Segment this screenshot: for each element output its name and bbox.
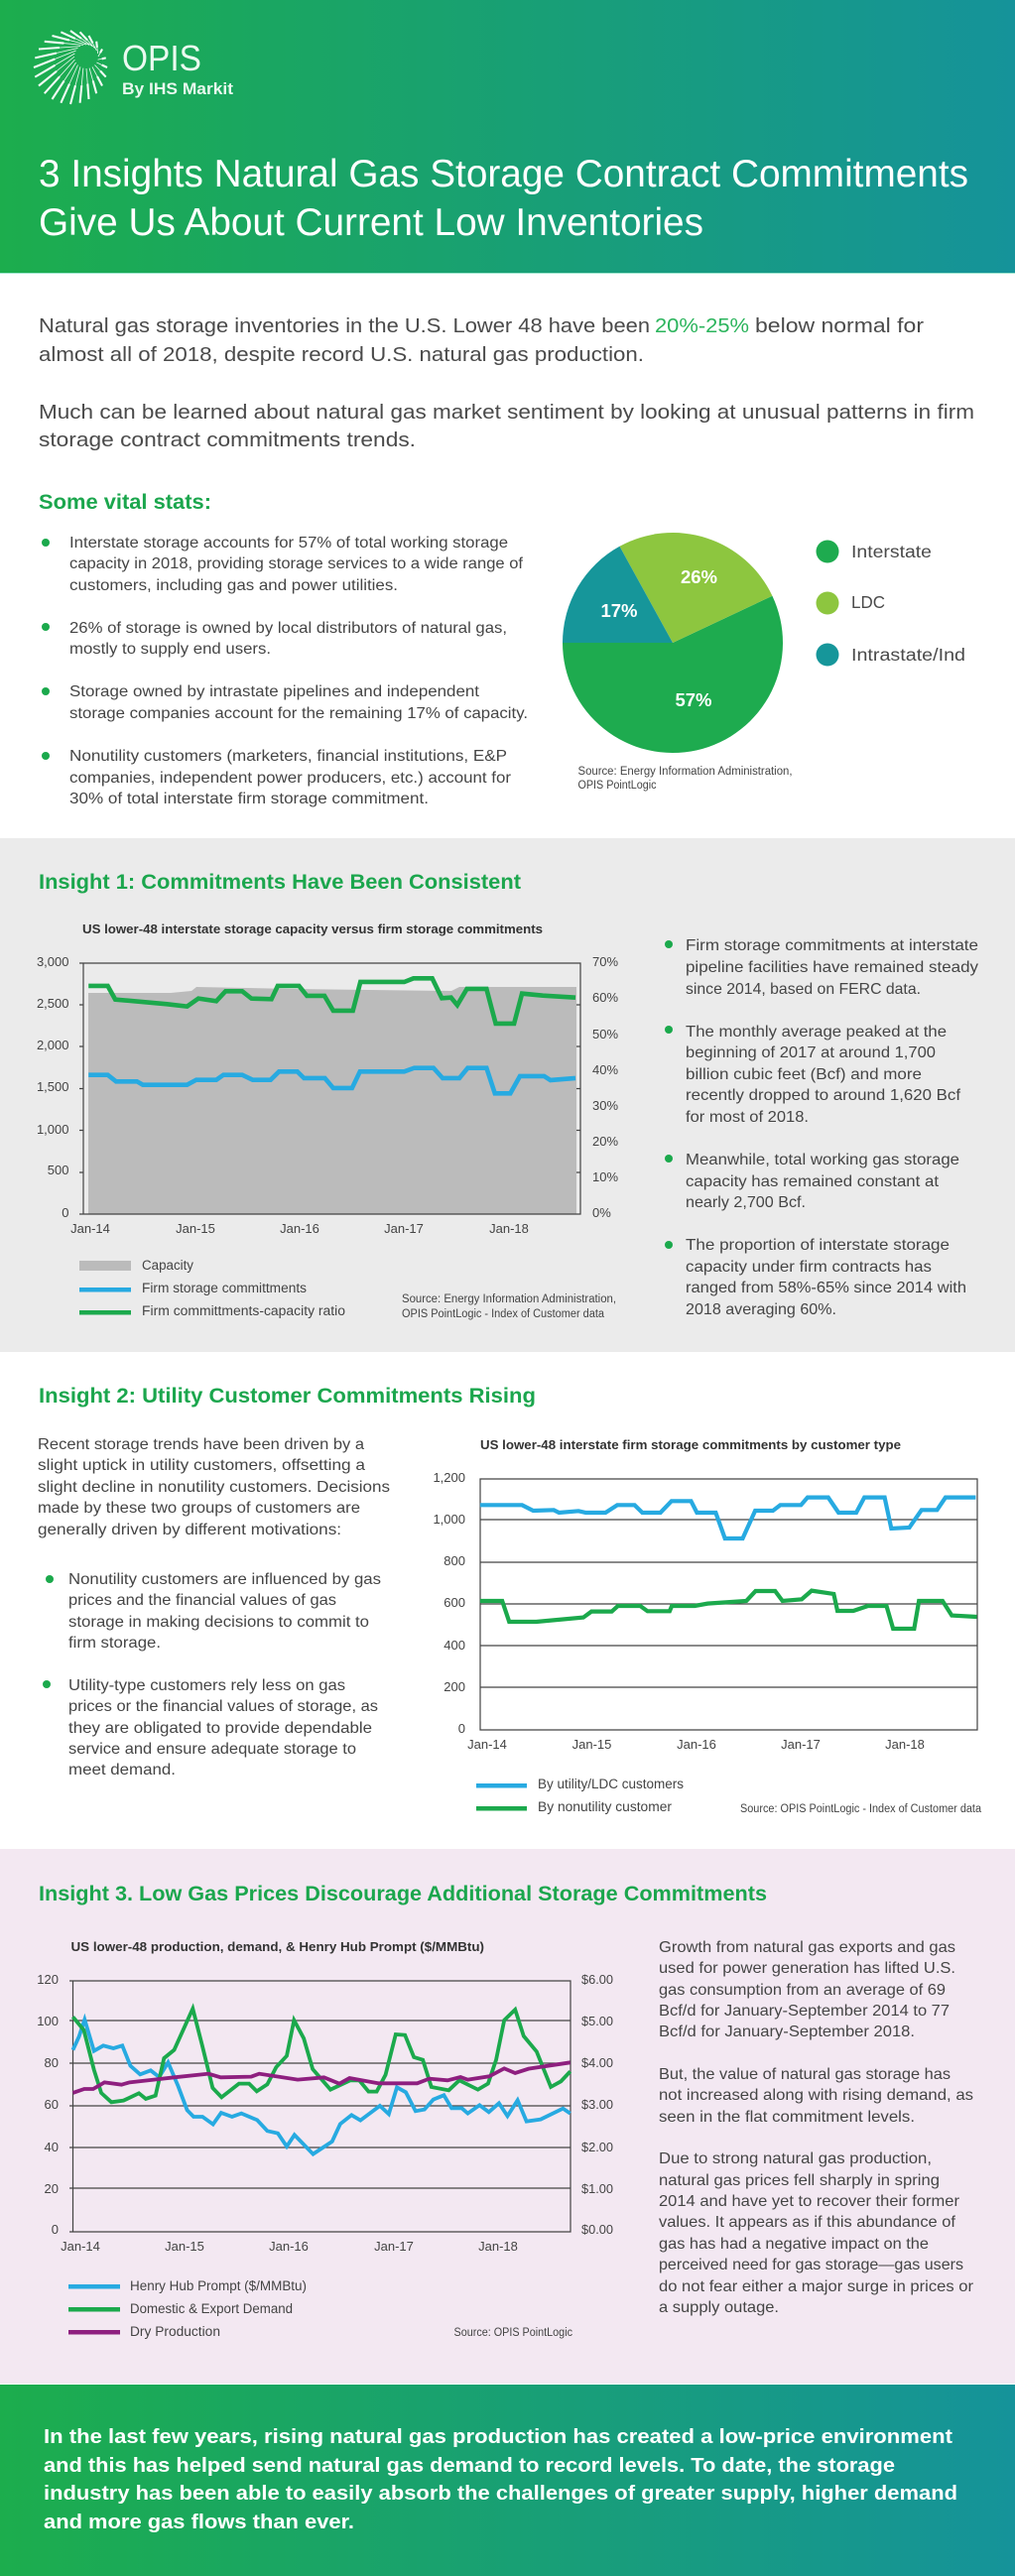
text block: insight 3: natural gas prices fell sharply in spring	[659, 2172, 940, 2189]
chart legend: Firm committments-capacity ratio	[142, 1303, 345, 1318]
bullet list: insight 1: ranged from 58%-65% since 2014 with	[686, 1280, 966, 1296]
area and line chart: capacity versus commitments: Jan-18	[489, 1221, 529, 1236]
area and line chart: capacity versus commitments: Jan-16	[280, 1221, 319, 1236]
area and line chart: capacity versus commitments: 0	[62, 1205, 69, 1220]
bullet list: insight 2: prices and the financial values of gas	[68, 1592, 336, 1609]
text block: insight 3: a supply outage.	[659, 2299, 779, 2316]
bullet list: insight 1: The monthly average peaked at the	[686, 1024, 947, 1041]
bullet list: vital stats: 30% of total interstate firm storage commitment.	[69, 791, 429, 807]
area and line chart: capacity versus commitments: 1,500	[37, 1079, 69, 1094]
bullet list: vital stats: 26% of storage is owned by local distributors of natural gas,	[69, 620, 507, 637]
chart legend	[79, 1258, 345, 1318]
line chart: production, demand and Henry Hub prompt: $2.00	[581, 2140, 613, 2154]
area and line chart: capacity versus commitments: 2,500	[37, 996, 69, 1011]
area and line chart: capacity versus commitments: 50%	[592, 1027, 618, 1042]
text block: insight 3: used for power generation has lifted U.S.	[659, 1960, 955, 1977]
pie chart: storage ownership: 26%	[681, 566, 717, 587]
line chart: production, demand and Henry Hub prompt: $1.00	[581, 2181, 613, 2196]
line chart: production, demand and Henry Hub prompt: 40	[45, 2140, 59, 2154]
bullet list: insight 2: meet demand.	[68, 1762, 176, 1779]
bullet list: insight 2: Utility-type customers rely less on gas	[68, 1677, 345, 1694]
intro paragraph: slight uptick in utility customers, offsetting a	[38, 1457, 365, 1474]
text block: insight 3: Bcf/d for January-September 2018.	[659, 2024, 915, 2040]
intro paragraph: slight decline in nonutility customers. Decisions	[38, 1479, 390, 1496]
area and line chart: capacity versus commitments: Jan-14	[70, 1221, 110, 1236]
source note: OPIS PointLogic - Index of Customer data	[402, 1308, 605, 1320]
text block: insight 3: Bcf/d for January-September 2014 to 77	[659, 2003, 950, 2020]
pie chart: storage ownership	[563, 533, 783, 753]
line chart: commitments by customer type: 400	[444, 1638, 465, 1653]
bullet list: insight 1	[665, 937, 978, 1318]
chart legend: Domestic & Export Demand	[130, 2301, 293, 2316]
text block: insight 3	[659, 1939, 974, 2316]
pie legend: LDC	[851, 592, 885, 612]
line chart: production, demand and Henry Hub prompt: 20	[45, 2181, 59, 2196]
line chart: production, demand and Henry Hub prompt: Jan-16	[269, 2239, 309, 2254]
line chart: production, demand and Henry Hub prompt: Jan-18	[478, 2239, 518, 2254]
area and line chart: capacity versus commitments: 500	[48, 1163, 69, 1177]
panel: insight 1	[0, 838, 1015, 1352]
bullet list: insight 2: storage in making decisions to commit to	[68, 1614, 369, 1631]
bullet list: insight 1: beginning of 2017 at around 1,700	[686, 1044, 936, 1061]
area and line chart: capacity versus commitments: 2,000	[37, 1038, 69, 1052]
bullet list: insight 1: billion cubic feet (Bcf) and more	[686, 1066, 922, 1083]
bullet list: vital stats	[42, 535, 528, 807]
line chart: commitments by customer type: Jan-18	[885, 1737, 925, 1752]
bullet list: insight 1: recently dropped to around 1,620 Bcf	[686, 1087, 961, 1104]
line chart: production, demand and Henry Hub prompt: Jan-17	[374, 2239, 414, 2254]
line chart: production, demand and Henry Hub prompt: 120	[37, 1972, 59, 1987]
bullet list: insight 1: nearly 2,700 Bcf.	[686, 1194, 806, 1211]
area and line chart: capacity versus commitments: 70%	[592, 954, 618, 969]
area and line chart: capacity versus commitments: Jan-15	[176, 1221, 215, 1236]
chart legend: By utility/LDC customers	[538, 1777, 684, 1791]
bullet list: insight 2: service and ensure adequate storage to	[68, 1741, 356, 1758]
bullet list: vital stats: capacity in 2018, providing storage services to a wide range of	[69, 555, 524, 572]
line chart: production, demand and Henry Hub prompt: Jan-14	[61, 2239, 100, 2254]
intro text: storage contract commitments trends.	[39, 429, 416, 451]
bullet list: insight 2: Nonutility customers are influenced by gas	[68, 1571, 381, 1588]
chart legend: Dry Production	[130, 2324, 220, 2339]
line chart: production, demand and Henry Hub prompt: $4.00	[581, 2055, 613, 2070]
bullet list: vital stats: customers, including gas and power utilities.	[69, 577, 398, 594]
line chart: production, demand and Henry Hub prompt	[37, 1972, 613, 2254]
bullet list: insight 2	[43, 1571, 381, 1779]
intro text: Natural gas storage inventories in the U.S. Lower 48 have been	[39, 314, 650, 337]
area and line chart: capacity versus commitments: 10%	[592, 1169, 618, 1184]
bullet list: insight 1: 2018 averaging 60%.	[686, 1301, 836, 1318]
intro paragraph: Recent storage trends have been driven by a	[38, 1436, 364, 1453]
pie legend: Intrastate/Ind	[851, 645, 965, 665]
source note: Source: Energy Information Administration,	[402, 1293, 616, 1305]
intro text	[39, 314, 974, 451]
pie source note	[577, 766, 792, 792]
line chart: production, demand and Henry Hub prompt: Jan-15	[165, 2239, 204, 2254]
bullet list: vital stats: Nonutility customers (marketers, financial institutions, E&P	[69, 748, 507, 765]
text block: insight 3: 2014 and have yet to recover their former	[659, 2193, 960, 2210]
line chart: commitments by customer type: Jan-15	[572, 1737, 611, 1752]
chart legend: By nonutility customer	[538, 1799, 673, 1814]
chart legend: Firm storage committments	[142, 1281, 307, 1295]
text block: insight 3: do not fear either a major surge in prices or	[659, 2278, 974, 2295]
intro text: almost all of 2018, despite record U.S. natural gas production.	[39, 343, 644, 366]
line chart: commitments by customer type: Jan-16	[677, 1737, 716, 1752]
text block: insight 3: seen in the flat commitment levels.	[659, 2109, 915, 2126]
bullet list: vital stats: Storage owned by intrastate pipelines and independent	[69, 683, 480, 700]
area and line chart: capacity versus commitments: 1,000	[37, 1122, 69, 1137]
closing statement: industry has been able to easily absorb the challenges of greater supply, higher demand	[44, 2482, 957, 2505]
line chart: production, demand and Henry Hub prompt: $3.00	[581, 2097, 613, 2112]
pie source note: OPIS PointLogic	[577, 780, 657, 792]
line chart: commitments by customer type: 600	[444, 1595, 465, 1610]
bullet list: insight 1: capacity under firm contracts has	[686, 1259, 932, 1276]
closing statement: and this has helped send natural gas demand to record levels. To date, the storage	[44, 2454, 895, 2477]
line chart: production, demand and Henry Hub prompt: 100	[37, 2014, 59, 2028]
bullet list: insight 2: they are obligated to provide dependable	[68, 1720, 372, 1737]
intro text: below normal for	[755, 314, 924, 337]
title: 3 Insights Natural Gas Storage Contract Commitments	[39, 153, 968, 195]
bullet list: insight 1: The proportion of interstate storage	[686, 1237, 950, 1254]
area and line chart: capacity versus commitments: 20%	[592, 1134, 618, 1149]
logo: OPIS By IHS Markit	[34, 31, 233, 104]
bullet list: insight 1: capacity has remained constant at	[686, 1173, 940, 1190]
line chart: commitments by customer type: 200	[444, 1679, 465, 1694]
bullet list: vital stats: mostly to supply end users.	[69, 641, 271, 658]
intro paragraph	[38, 1436, 390, 1538]
line chart: commitments by customer type: 1,000	[433, 1512, 465, 1527]
bullet list: insight 2: prices or the financial values of storage, as	[68, 1698, 378, 1715]
chart title: US lower-48 interstate firm storage commitments by customer type	[480, 1437, 901, 1452]
bullet list: insight 1: pipeline facilities have remained steady	[686, 959, 978, 976]
intro text: 20%-25%	[655, 314, 749, 337]
area and line chart: capacity versus commitments: Jan-17	[384, 1221, 424, 1236]
chart legend: Capacity	[142, 1258, 193, 1273]
bullet list: vital stats: storage companies account for the remaining 17% of capacity.	[69, 705, 528, 722]
line chart: production, demand and Henry Hub prompt: $5.00	[581, 2014, 613, 2028]
closing statement: In the last few years, rising natural gas production has created a low-price environment	[44, 2425, 952, 2448]
text block: insight 3: But, the value of natural gas storage has	[659, 2066, 951, 2083]
bullet list: insight 1: since 2014, based on FERC data.	[686, 981, 921, 998]
text block: insight 3: gas has had a negative impact on the	[659, 2236, 929, 2253]
pie legend	[816, 540, 965, 667]
bullet list: insight 1: for most of 2018.	[686, 1109, 809, 1126]
logo wordmark: OPIS	[122, 38, 201, 78]
logo tagline: By IHS Markit	[122, 79, 233, 98]
intro paragraph: made by these two groups of customers are	[38, 1500, 360, 1517]
pie source note: Source: Energy Information Administration,	[577, 766, 792, 778]
text block: insight 3: values. It appears as if this abundance of	[659, 2214, 956, 2231]
bullet list: insight 1: Meanwhile, total working gas storage	[686, 1152, 959, 1168]
header banner	[0, 0, 1015, 274]
line chart: production, demand and Henry Hub prompt: $0.00	[581, 2222, 613, 2237]
line chart: commitments by customer type: Jan-14	[467, 1737, 507, 1752]
closing statement: and more gas flows than ever.	[44, 2511, 354, 2533]
section: some vital stats	[39, 490, 965, 807]
pie legend: Interstate	[851, 542, 932, 561]
closing statement	[44, 2425, 957, 2533]
source note	[402, 1293, 616, 1320]
text block: insight 3: not increased along with rising demand, as	[659, 2087, 973, 2104]
bullet list: insight 1: Firm storage commitments at interstate	[686, 937, 978, 954]
line chart: production, demand and Henry Hub prompt: 80	[45, 2055, 59, 2070]
heading: insight 1: Insight 1: Commitments Have Been Consistent	[39, 870, 521, 894]
footer banner	[0, 2385, 1015, 2576]
line chart: commitments by customer type: 0	[458, 1721, 465, 1736]
area and line chart: capacity versus commitments: 60%	[592, 990, 618, 1005]
chart legend	[68, 2278, 307, 2339]
source note: Source: OPIS PointLogic	[454, 2327, 572, 2339]
text block: insight 3: Growth from natural gas exports and gas	[659, 1939, 955, 1956]
area and line chart: capacity versus commitments	[37, 954, 618, 1236]
line chart: commitments by customer type: 1,200	[433, 1470, 465, 1485]
pie chart: storage ownership: 57%	[675, 689, 712, 710]
source note: Source: OPIS PointLogic - Index of Customer data	[740, 1803, 982, 1815]
text block: insight 3: perceived need for gas storage—gas users	[659, 2257, 963, 2273]
panel: insight 2	[0, 1352, 1015, 1849]
heading: some vital stats: Some vital stats:	[39, 490, 211, 514]
title: Give Us About Current Low Inventories	[39, 201, 703, 244]
text block: insight 3: Due to strong natural gas production,	[659, 2150, 932, 2167]
heading: insight 2: Insight 2: Utility Customer Commitments Rising	[39, 1384, 536, 1408]
line chart: commitments by customer type: 800	[444, 1553, 465, 1568]
area and line chart: capacity versus commitments: 30%	[592, 1098, 618, 1113]
title	[39, 153, 968, 244]
heading: insight 3: Insight 3. Low Gas Prices Discourage Additional Storage Commitments	[39, 1882, 767, 1905]
pie chart: storage ownership: 17%	[600, 600, 638, 621]
line chart: commitments by customer type	[433, 1470, 977, 1752]
intro paragraph: generally driven by different motivations:	[38, 1522, 341, 1538]
line chart: production, demand and Henry Hub prompt: 0	[52, 2222, 59, 2237]
area and line chart: capacity versus commitments: 3,000	[37, 954, 69, 969]
chart legend	[476, 1777, 684, 1814]
line chart: production, demand and Henry Hub prompt: $6.00	[581, 1972, 613, 1987]
bullet list: insight 2: firm storage.	[68, 1635, 161, 1652]
chart legend: Henry Hub Prompt ($/MMBtu)	[130, 2278, 307, 2293]
bullet list: vital stats: companies, independent power producers, etc.) account for	[69, 770, 512, 787]
chart title: US lower-48 production, demand, & Henry Hub Prompt ($/MMBtu)	[71, 1939, 484, 1954]
icon: sunburst swirl	[34, 31, 107, 104]
text block: insight 3: gas consumption from an average of 69	[659, 1982, 946, 1999]
chart title: US lower-48 interstate storage capacity versus firm storage commitments	[82, 921, 543, 936]
area and line chart: capacity versus commitments: 0%	[592, 1205, 611, 1220]
bullet list: vital stats: Interstate storage accounts for 57% of total working storage	[69, 535, 508, 552]
area and line chart: capacity versus commitments: 40%	[592, 1062, 618, 1077]
panel: insight 3	[0, 1849, 1015, 2384]
intro text: Much can be learned about natural gas market sentiment by looking at unusual patterns in firm	[39, 401, 974, 424]
line chart: production, demand and Henry Hub prompt: 60	[45, 2097, 59, 2112]
line chart: commitments by customer type: Jan-17	[781, 1737, 821, 1752]
